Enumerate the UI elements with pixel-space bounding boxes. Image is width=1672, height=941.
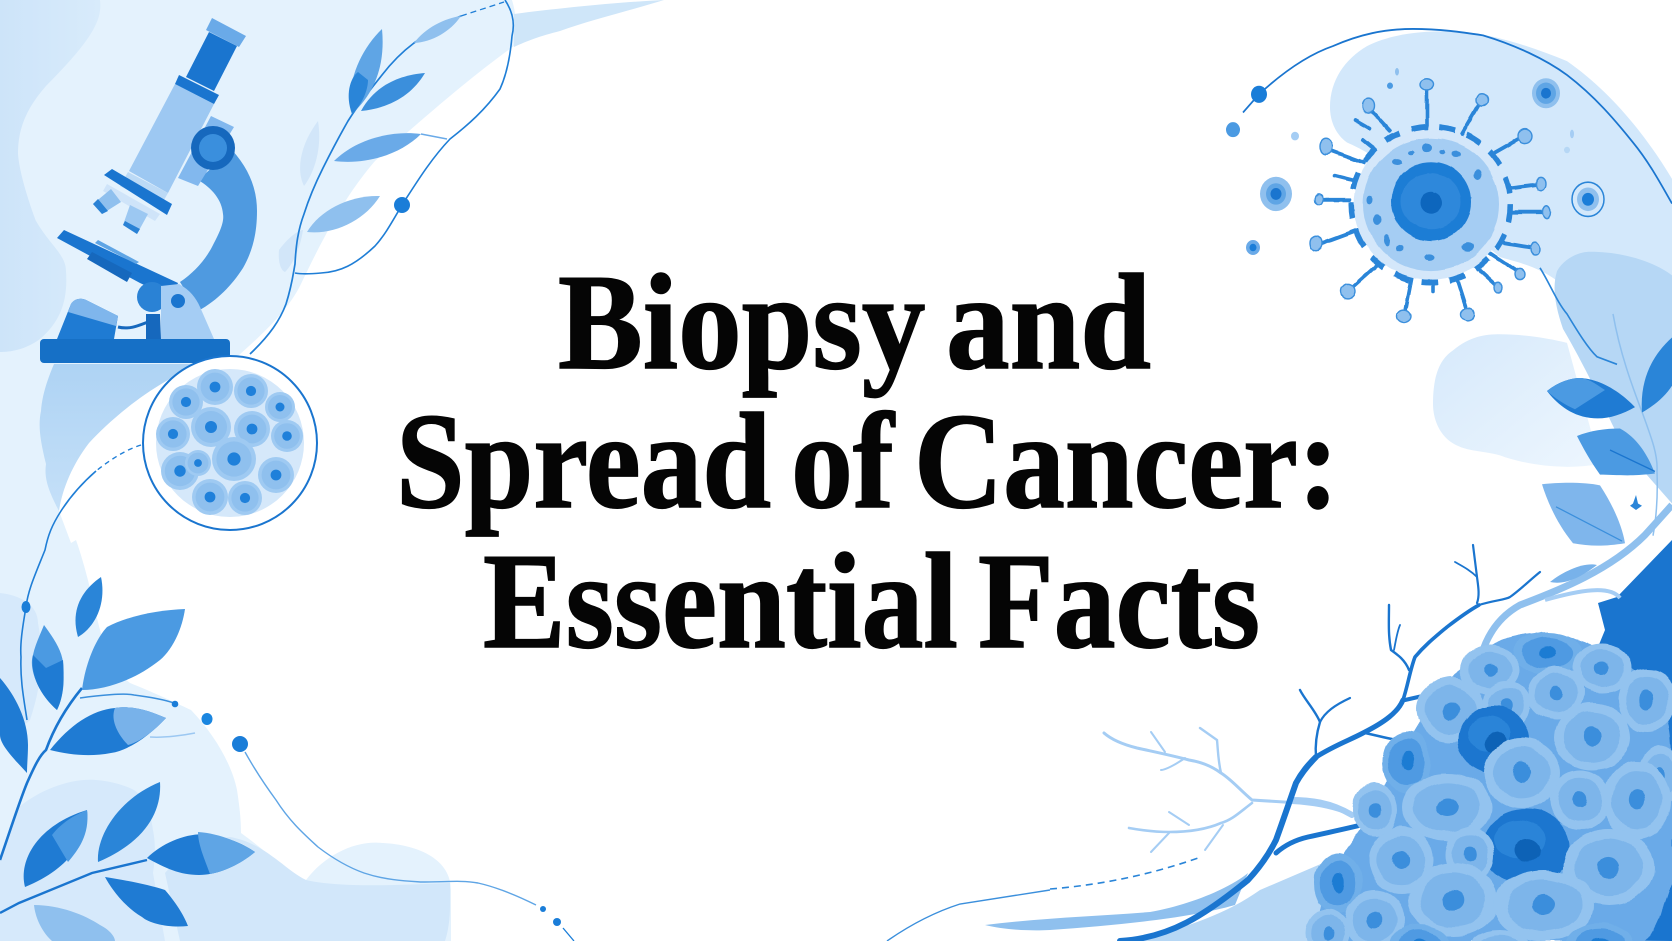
title: Essential Facts (483, 525, 1260, 677)
connector: bottom-left curve with dots (245, 752, 574, 941)
background panel: top ribbon (514, 0, 664, 47)
icon: virus cell (1310, 79, 1551, 322)
background panel: right top blob (1330, 31, 1672, 281)
background panel: blue blob under microscope (40, 364, 229, 511)
leaves: bottom-left upper branch (0, 577, 248, 860)
title: Biopsy and (558, 246, 1151, 398)
background panel: right mid blobs (1433, 252, 1672, 504)
connector: dashed line from sample circle to lower leaves (21, 445, 141, 720)
connector: dashed line at bottom right (1050, 857, 1201, 889)
tumor backdrop: dark blue corner (1560, 540, 1672, 941)
title: Spread of Cancer: (396, 385, 1339, 537)
icon: cell sample circle (143, 356, 317, 530)
tumor cell cluster (1306, 632, 1672, 941)
vine: top-left branch with leaves (250, 2, 504, 354)
background panel: bottom-left blobs (0, 593, 450, 941)
vessels: dark blue branching tree (1120, 545, 1540, 941)
background panel: top-left pale wash (0, 0, 516, 941)
title (396, 246, 1339, 677)
vessels: pale blue branches (1104, 728, 1352, 852)
leaves: right side branch (1540, 268, 1672, 546)
leaves: bottom-left lower branch (0, 782, 255, 941)
arc with nodes around virus (1226, 29, 1672, 204)
small spores around virus (1246, 68, 1604, 255)
curve with node: top-left connector (295, 0, 513, 274)
ribbons: flowing bands (887, 505, 1672, 941)
background panel: far-left darker band (0, 0, 100, 352)
icon: microscope (40, 18, 257, 363)
